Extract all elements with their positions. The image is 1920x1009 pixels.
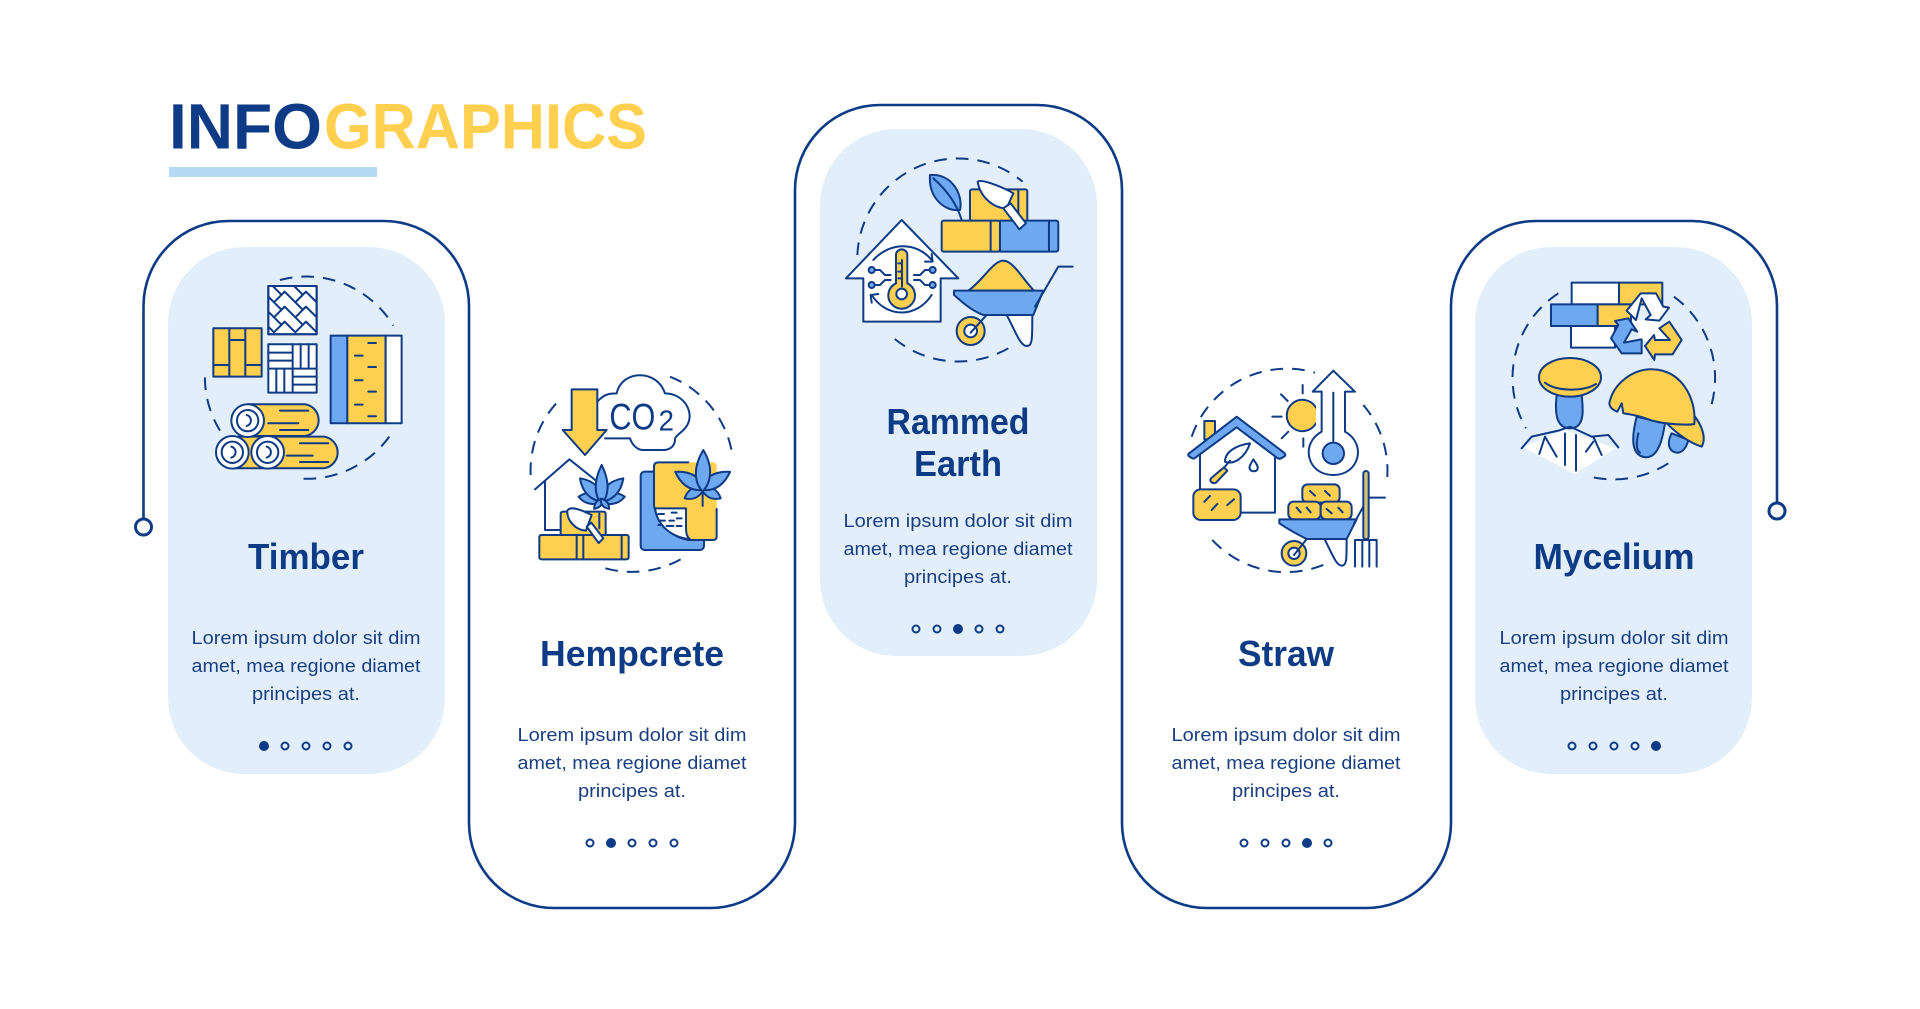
title bbox=[169, 90, 647, 162]
body: timber bbox=[192, 627, 420, 704]
pagination dots: rammed earth bbox=[912, 625, 1004, 633]
start node bbox=[136, 519, 152, 535]
title underline bbox=[169, 167, 377, 177]
heading: mycelium: Mycelium bbox=[1534, 536, 1694, 577]
icon: mycelium bbox=[1513, 283, 1715, 479]
infographic canvas bbox=[134, 104, 1786, 910]
body: straw bbox=[1172, 724, 1400, 801]
body: straw: principes at. bbox=[1232, 780, 1340, 801]
icon: straw bbox=[1188, 369, 1387, 572]
body: rammed earth: amet, mea regione diamet bbox=[844, 538, 1072, 559]
body: hempcrete: amet, mea regione diamet bbox=[518, 752, 746, 773]
heading: rammed earth bbox=[886, 401, 1030, 484]
heading: hempcrete: Hempcrete bbox=[540, 633, 724, 674]
heading: timber: Timber bbox=[248, 536, 364, 577]
pagination dots: hempcrete bbox=[586, 839, 678, 847]
body: mycelium bbox=[1500, 627, 1728, 704]
body: hempcrete: principes at. bbox=[578, 780, 686, 801]
heading: rammed earth: Earth bbox=[914, 443, 1002, 484]
end node bbox=[1769, 503, 1785, 519]
pagination dots: straw bbox=[1240, 839, 1332, 847]
body: mycelium: amet, mea regione diamet bbox=[1500, 655, 1728, 676]
icon: hempcrete bbox=[531, 375, 733, 572]
panel background: timber bbox=[168, 247, 445, 774]
icon: timber bbox=[205, 277, 402, 479]
title: INFO bbox=[169, 90, 322, 162]
body: timber: Lorem ipsum dolor sit dim bbox=[192, 627, 420, 648]
icon: hempcrete: 2 bbox=[659, 406, 674, 438]
panel background: rammed earth bbox=[820, 129, 1097, 656]
pagination dots: mycelium bbox=[1568, 742, 1660, 750]
heading: straw: Straw bbox=[1238, 633, 1335, 674]
heading: rammed earth: Rammed bbox=[886, 401, 1030, 442]
icon: hempcrete: CO bbox=[609, 396, 655, 437]
body: straw: amet, mea regione diamet bbox=[1172, 752, 1400, 773]
panel background: mycelium bbox=[1475, 247, 1752, 774]
icon: rammed earth bbox=[846, 158, 1073, 362]
body: rammed earth bbox=[844, 510, 1072, 587]
body: timber: principes at. bbox=[252, 683, 360, 704]
serpentine connecting outline bbox=[144, 105, 1777, 908]
body: rammed earth: principes at. bbox=[904, 566, 1012, 587]
body: mycelium: principes at. bbox=[1560, 683, 1668, 704]
body: rammed earth: Lorem ipsum dolor sit dim bbox=[844, 510, 1072, 531]
body: timber: amet, mea regione diamet bbox=[192, 655, 420, 676]
pagination dots: timber bbox=[260, 742, 352, 750]
body: hempcrete bbox=[518, 724, 746, 801]
body: mycelium: Lorem ipsum dolor sit dim bbox=[1500, 627, 1728, 648]
body: hempcrete: Lorem ipsum dolor sit dim bbox=[518, 724, 746, 745]
body: straw: Lorem ipsum dolor sit dim bbox=[1172, 724, 1400, 745]
title: GRAPHICS bbox=[324, 90, 647, 162]
